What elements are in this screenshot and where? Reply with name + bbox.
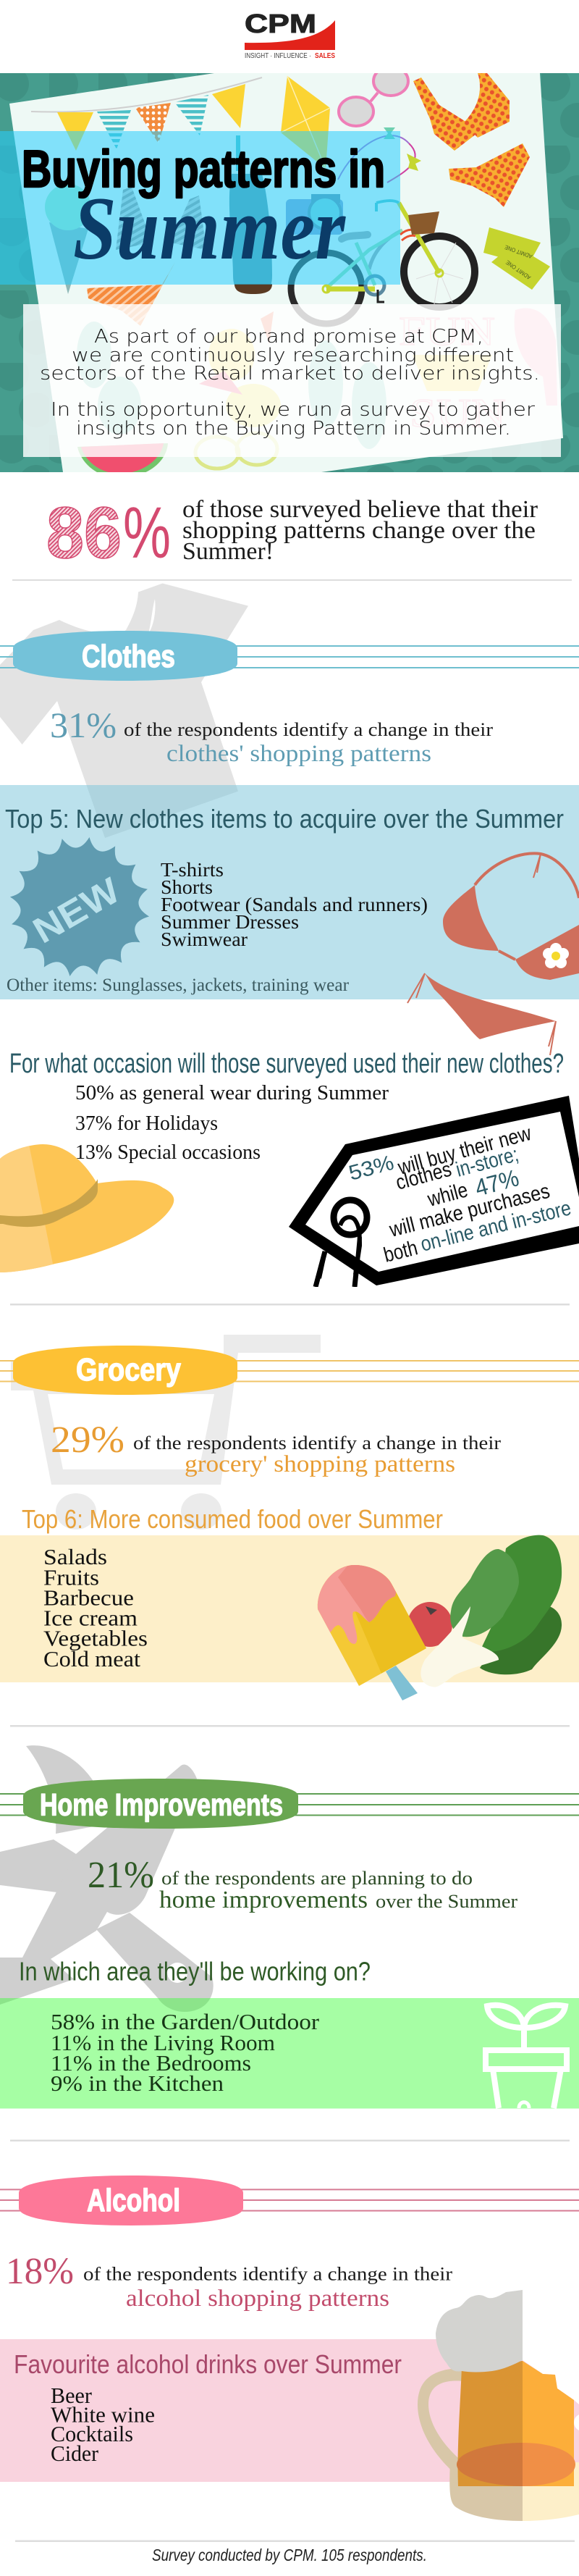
stat: 21 percent: of the respondents are planning to do: [161, 1868, 473, 1889]
panel: favourite drinks: [0, 2339, 579, 2482]
icon: t-shirt: [0, 584, 248, 838]
heading: top 6 food: Top 6: More consumed food over Summer: [22, 1504, 443, 1534]
list: clothes items: Footwear (Sandals and runners): [161, 894, 428, 915]
logo: CPM: CPM: [245, 9, 316, 38]
list: food items: Ice cream: [43, 1605, 138, 1631]
list: food items: [43, 1544, 148, 1671]
list: home areas: 11% in the Living Room: [51, 2030, 275, 2055]
price tag callout: will make purchases: [386, 1180, 552, 1242]
stat: 31 percent: of the respondents identify a change in their: [124, 719, 493, 740]
icon: coral bikini: [407, 853, 579, 1055]
bottle: [229, 135, 272, 294]
panel: top 5 clothes: [0, 785, 579, 999]
other items note: Other items: Sunglasses, jackets, training wear: [7, 976, 350, 995]
list: food items: Fruits: [43, 1564, 99, 1590]
list: drinks: Beer: [51, 2383, 93, 2408]
title: [22, 140, 385, 278]
home improvements heading: Home Improvements: [40, 1787, 283, 1822]
stat: 31 percent: clothes' shopping patterns: [166, 741, 431, 767]
icon: wrench and screwdriver: [0, 1745, 214, 2012]
list: home areas: 58% in the Garden/Outdoor: [51, 2009, 320, 2034]
grocery heading: [0, 1346, 579, 1395]
stat: 86 percent: 86: [46, 492, 122, 574]
list: drinks: Cocktails: [51, 2421, 133, 2446]
heading: favourite drinks: Favourite alcohol drinks over Summer: [14, 2349, 402, 2379]
icon: shopping cart: [11, 1335, 321, 1530]
stat: 18 percent: alcohol shopping patterns: [126, 2286, 389, 2312]
stat: 86 percent: shopping patterns change over the: [182, 517, 536, 544]
list: occasions: [75, 1082, 389, 1164]
price tag callout: 53%: [347, 1151, 397, 1186]
lower illustrations under panel: [77, 308, 557, 478]
stat: 29 percent: of the respondents identify a change in their: [133, 1432, 501, 1453]
list: clothes items: [161, 859, 428, 950]
heading: area question: In which area they'll be working on?: [19, 1957, 371, 1986]
logo: CPM: INSIGHT · INFLUENCE ·: [245, 52, 313, 60]
intro text: sectors of the Retail market to deliver insights.: [40, 363, 540, 385]
home improvements heading: [0, 1779, 579, 1829]
icon: beer mug: [418, 2281, 579, 2521]
panel: top 6 food: [0, 1535, 579, 1682]
lower illustrations under panel: SUN: [410, 391, 506, 436]
new label: NEW: [26, 870, 127, 952]
stat: 86 percent: [46, 492, 538, 574]
panel: title banner: [0, 131, 400, 285]
price tag callout: [289, 1096, 579, 1287]
stat: 29 percent: [51, 1419, 501, 1477]
sunglasses: [339, 67, 408, 126]
title: Buying patterns in: [22, 140, 385, 198]
hero: summer illustration banner: [0, 67, 579, 478]
intro text: In this opportunity, we run a survey to gather: [51, 399, 535, 421]
stat: 21 percent: [88, 1855, 517, 1913]
alcohol heading: [0, 2176, 579, 2225]
stat: 18 percent: [6, 2251, 452, 2312]
icon: greens and apple: [407, 1535, 562, 1687]
price tag callout: in-store;: [454, 1143, 521, 1182]
bikini: orange dotted: [413, 73, 530, 207]
clothes heading: [0, 631, 579, 681]
intro text: we are continuously researching different: [72, 345, 514, 366]
stat: 21 percent: 21%: [88, 1855, 154, 1896]
tickets: ADMIT ONE: [504, 259, 532, 281]
clothes heading: Clothes: [82, 639, 175, 674]
bow wire: [338, 127, 421, 182]
tickets: ADMIT ONE: [504, 243, 533, 260]
price tag callout: while: [425, 1178, 470, 1212]
logo: CPM: SALES: [315, 52, 335, 60]
list: clothes items: Swimwear: [161, 928, 248, 950]
camera: [286, 194, 343, 235]
lower illustrations under panel: FUN: [399, 309, 495, 354]
price tag callout: clothes: [394, 1158, 454, 1195]
list: drinks: [51, 2383, 155, 2466]
list: clothes items: Summer Dresses: [161, 911, 299, 933]
list: occasions: 13% Special occasions: [75, 1141, 261, 1164]
list: home areas: [51, 2009, 320, 2096]
stat: 29 percent: grocery' shopping patterns: [185, 1451, 455, 1477]
footer note: Survey conducted by CPM. 105 respondents.: [152, 2546, 427, 2564]
price tag callout: both: [381, 1236, 420, 1267]
icon: new starburst: [0, 827, 159, 986]
stat: 86 percent: %: [123, 492, 171, 574]
orange striped bikini: [87, 262, 175, 326]
intro text: insights on the Buying Pattern in Summer.: [76, 418, 511, 440]
panel: intro background: [23, 304, 561, 457]
grey striped bikini: [116, 187, 206, 250]
list: home areas: 9% in the Kitchen: [51, 2071, 224, 2096]
bicycle: [291, 201, 475, 324]
stat: 21 percent: home improvements: [159, 1887, 368, 1913]
list: clothes items: T-shirts: [161, 859, 224, 881]
list: drinks: White wine: [51, 2401, 155, 2428]
tickets: [483, 227, 550, 290]
bunting flags: [31, 77, 262, 151]
list: food items: Cold meat: [43, 1646, 140, 1671]
stat: 21 percent: over the Summer: [376, 1891, 517, 1912]
icon: popsicle: [317, 1565, 426, 1700]
list: food items: Salads: [43, 1544, 107, 1569]
stat: 31 percent: [50, 705, 493, 767]
kite: [281, 76, 330, 169]
alcohol heading: Alcohol: [87, 2183, 180, 2218]
stat: 18 percent: 18%: [6, 2251, 74, 2292]
price tag callout: will buy their new: [395, 1122, 534, 1180]
list: home areas: 11% in the Bedrooms: [51, 2050, 251, 2076]
price tag callout: 47%: [472, 1164, 522, 1201]
paper background: [9, 73, 563, 472]
intro text: As part of our brand promise at CPM,: [94, 326, 483, 348]
panel: home areas: [0, 1998, 579, 2109]
list: clothes items: Shorts: [161, 876, 213, 898]
stat: 31 percent: 31%: [50, 705, 117, 745]
list: food items: Vegetables: [43, 1625, 148, 1651]
icon: straw hat: [0, 1144, 174, 1272]
intro text: [40, 326, 540, 440]
ice cream cone: [45, 184, 91, 294]
logo: CPM: [245, 9, 335, 60]
grocery heading: Grocery: [76, 1352, 181, 1388]
title: Summer: [73, 179, 347, 278]
stat: 86 percent: of those surveyed believe that their: [182, 496, 538, 523]
stat: 29 percent: 29%: [51, 1419, 124, 1461]
stat: 18 percent: of the respondents identify a change in their: [83, 2264, 452, 2284]
list: drinks: Cider: [51, 2441, 99, 2466]
list: food items: Barbecue: [43, 1585, 134, 1611]
list: occasions: 50% as general wear during Summer: [75, 1082, 389, 1104]
stat: 86 percent: Summer!: [182, 538, 274, 565]
icon: plant pot: [486, 2005, 567, 2108]
list: occasions: 37% for Holidays: [75, 1112, 218, 1135]
